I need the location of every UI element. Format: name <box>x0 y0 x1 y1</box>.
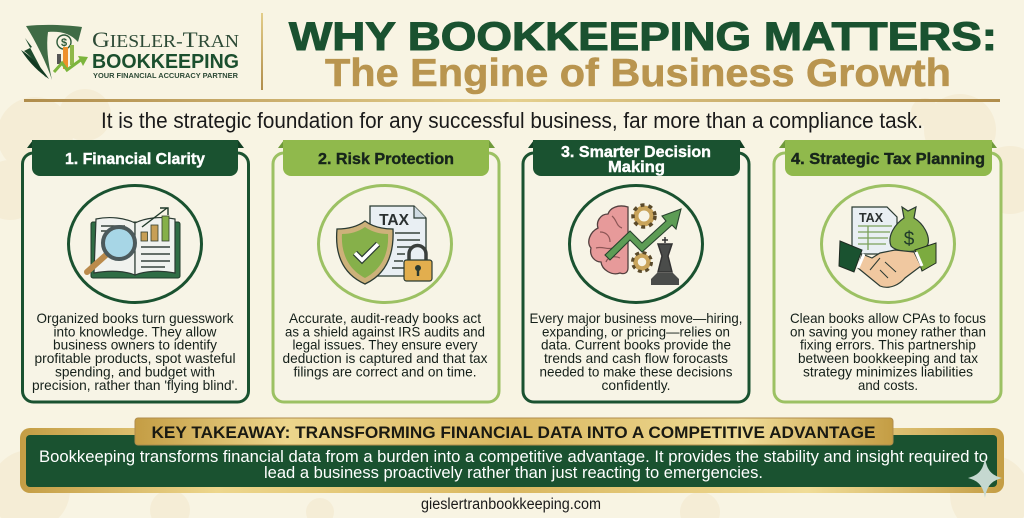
body text: into knowledge. They allow <box>54 324 217 340</box>
icon: sparkle <box>968 458 1002 498</box>
key takeaway text: lead a business proactively rather than just reacting to emergencies. <box>264 463 763 482</box>
body text: deduction is captured and that tax <box>282 351 488 366</box>
body text: strategy minimizes liabilities <box>803 364 973 380</box>
body text: legal issues. They ensure every <box>292 338 478 352</box>
body text: Accurate, audit-ready books act <box>289 311 481 326</box>
heading: 2. Risk Protection: 2. Risk Protection <box>318 151 454 168</box>
icon: tax form, money bag and handshake: TAX <box>859 211 884 225</box>
body text: filings are correct and on time. <box>294 364 476 380</box>
panel: financial clarity <box>22 140 248 402</box>
body text: business owners to identify <box>53 338 217 352</box>
body text <box>282 311 488 380</box>
icon: shield, tax form and padlock <box>337 206 432 284</box>
tagline: YOUR FINANCIAL ACCURACY PARTNER <box>93 73 238 80</box>
body text: confidently. <box>602 378 670 393</box>
body text: expanding, or pricing—relies on <box>542 324 730 340</box>
icon: open book with magnifier and growth chart <box>87 208 180 278</box>
website url: gieslertranbookkeeping.com <box>421 496 601 513</box>
body text: between bookkeeping and tax <box>798 351 978 366</box>
company name bold line: BOOKKEEPING <box>92 51 239 73</box>
panel: strategic tax planning <box>774 140 1001 402</box>
heading: 3. Smarter Decision Making <box>533 140 740 176</box>
heading: 1. Financial Clarity <box>32 140 238 176</box>
body text: Every major business move—hiring, <box>530 311 742 326</box>
body text: fixing errors. This partnership <box>800 338 976 352</box>
key takeaway banner <box>135 418 893 445</box>
body text: spending, and budget with <box>55 364 215 380</box>
heading: 3. Smarter Decision Making: 3. Smarter Decision <box>561 144 711 161</box>
body text: precision, rather than 'flying blind'. <box>32 378 238 393</box>
heading: 4. Strategic Tax Planning: 4. Strategic Tax Planning <box>791 151 985 168</box>
body text: and costs. <box>858 378 918 393</box>
heading: 4. Strategic Tax Planning <box>785 140 992 176</box>
title <box>289 15 997 95</box>
panel: smarter decision making <box>523 140 749 402</box>
body text: on saving you money rather than <box>790 324 986 340</box>
key takeaway text <box>39 447 988 482</box>
key takeaway banner: KEY TAKEAWAY: TRANSFORMING FINANCIAL DATA INTO A COMPETITIVE ADVANTAGE <box>152 423 876 442</box>
body text: needed to make these decisions <box>540 364 733 380</box>
icon: fanned pages with chart: $ <box>61 37 67 49</box>
heading line one: WHY BOOKKEEPING MATTERS: <box>289 15 997 59</box>
body text: Organized books turn guesswork <box>36 311 234 326</box>
icon: tax form, money bag and handshake <box>839 207 936 287</box>
icon: brain, gears, growth arrow and chess king <box>589 205 681 285</box>
body text: trends and cash flow forocasts <box>544 351 728 366</box>
body text: as a shield against IRS audits and <box>285 324 485 340</box>
company name: GIESLER- TRAN <box>92 27 239 52</box>
key takeaway text: Bookkeeping transforms financial data from a burden into a competitive advantage. It provides the stability and insight required to <box>39 447 988 466</box>
body text <box>32 311 238 393</box>
subtitle: It is the strategic foundation for any successful business, far more than a compliance task. <box>101 108 923 133</box>
icon: shield, tax form and padlock: TAX <box>379 212 410 229</box>
heading: 3. Smarter Decision Making: Making <box>608 159 665 176</box>
body text: Clean books allow CPAs to focus <box>790 311 986 326</box>
heading: 2. Risk Protection <box>283 140 489 176</box>
panel: key takeaway <box>20 418 1004 498</box>
icon: tax form, money bag and handshake: $ <box>904 229 915 250</box>
panel: risk protection <box>273 140 499 402</box>
body text <box>530 311 742 393</box>
body text <box>790 311 986 393</box>
logo: Giesler-Tran Bookkeeping <box>21 25 239 80</box>
body text: data. Current books provide the <box>541 338 731 352</box>
heading: 1. Financial Clarity: 1. Financial Clarity <box>65 151 205 168</box>
heading line two: The Engine of Business Growth <box>325 52 951 95</box>
body text: profitable products, spot wasteful <box>34 351 236 366</box>
icon: fanned pages with chart <box>21 25 88 80</box>
